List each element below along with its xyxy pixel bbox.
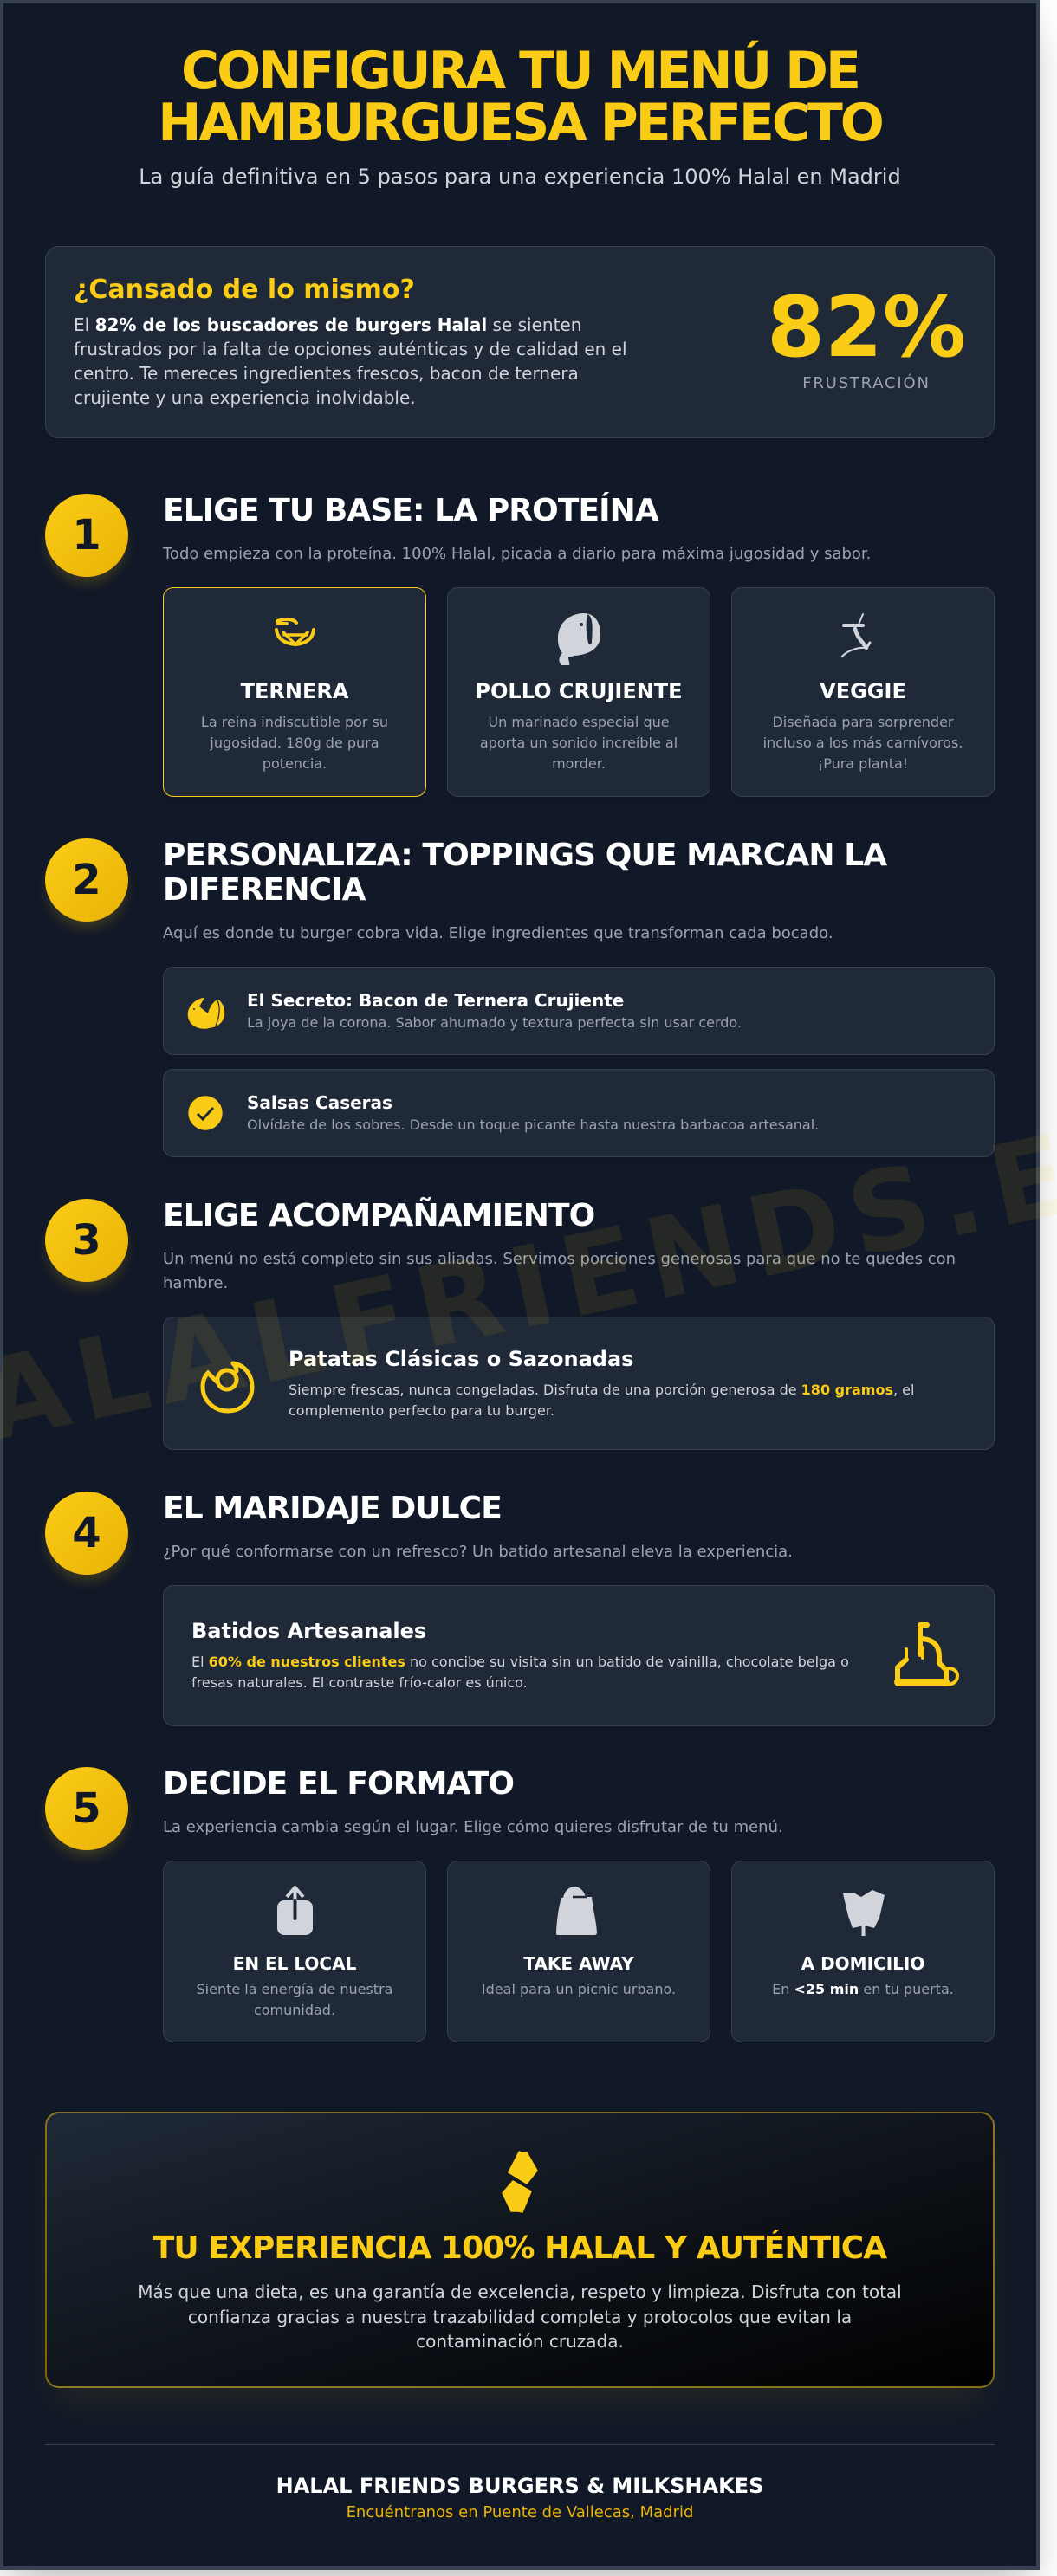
card title: POLLO CRUJIENTE: [475, 679, 683, 703]
format text: Siente la energía de nuestra: [197, 1981, 392, 1997]
stat label: FRUSTRACIÓN: [802, 374, 931, 392]
icon: fries: [201, 1362, 255, 1414]
icon: delivery: [843, 1890, 885, 1936]
step 5 number: [45, 1767, 128, 1850]
step 2 heading: PERSONALIZA: TOPPINGS QUE MARCAN LA: [163, 838, 886, 873]
card title: TERNERA: [241, 679, 348, 703]
panel text: Siempre frescas, nunca congeladas. Disfruta de una porción generosa de 180 gramos, el: [289, 1382, 914, 1398]
step 4 number: 4: [72, 1509, 101, 1557]
format: take away: [447, 1861, 710, 2042]
step 3 heading: ELIGE ACOMPAÑAMIENTO: [163, 1198, 594, 1233]
icon: halal mark: [502, 2151, 538, 2213]
step 2 heading: [163, 838, 887, 908]
step 3 description: hambre.: [163, 1274, 228, 1292]
step 3 number: [45, 1199, 128, 1282]
topping text: La joya de la corona. Sabor ahumado y textura perfecta sin usar cerdo.: [247, 1014, 742, 1031]
format title: A DOMICILIO: [801, 1953, 924, 1974]
format text: En <25 min en tu puerta.: [772, 1981, 954, 1997]
topping: salsas: [163, 1069, 995, 1157]
panel: frustration intro: [45, 246, 995, 438]
promise text: confianza gracias a nuestra trazabilidad completa y protocolos que evitan la: [188, 2306, 852, 2327]
panel text: fresas naturales. El contraste frío-calor es único.: [191, 1674, 528, 1691]
icon: table arrow: [277, 1886, 313, 1935]
promise heading: TU EXPERIENCIA 100% HALAL Y AUTÉNTICA: [153, 2230, 886, 2266]
intro text: [74, 314, 627, 408]
icon: bag: [556, 1887, 597, 1935]
card text: [763, 714, 963, 772]
title: CONFIGURA TU MENÚ DE: [181, 41, 859, 101]
card text: La reina indiscutible por su: [201, 714, 388, 730]
card text: Diseñada para sorprender: [772, 714, 953, 730]
topping text: Olvídate de los sobres. Desde un toque picante hasta nuestra barbacoa artesanal.: [247, 1116, 819, 1133]
topping title: Salsas Caseras: [247, 1092, 392, 1113]
promise text: Más que una dieta, es una garantía de excelencia, respeto y limpieza. Disfruta con total: [138, 2282, 902, 2302]
footer brand: HALAL FRIENDS BURGERS & MILKSHAKES: [276, 2474, 763, 2498]
format title: TAKE AWAY: [523, 1953, 634, 1974]
option: pollo: [447, 587, 710, 797]
format title: EN EL LOCAL: [233, 1953, 356, 1974]
step 3 number: 3: [72, 1216, 101, 1265]
intro text: frustrados por la falta de opciones auténticas y de calidad en el: [74, 339, 627, 359]
panel text: [289, 1382, 914, 1419]
intro text: crujiente y una experiencia inolvidable.: [74, 387, 416, 408]
promise text: contaminación cruzada.: [416, 2331, 624, 2352]
panel text: El 60% de nuestros clientes no concibe su visita sin un batido de vainilla, chocolate belga o: [191, 1654, 849, 1670]
panel title: Batidos Artesanales: [191, 1619, 426, 1643]
intro text: El 82% de los buscadores de burgers Halal se sienten: [74, 314, 581, 335]
title: [158, 40, 882, 153]
step 1 description: Todo empieza con la proteína. 100% Halal, picada a diario para máxima jugosidad y sabor.: [163, 545, 871, 563]
promise text: [138, 2282, 902, 2352]
panel title: Patatas Clásicas o Sazonadas: [289, 1347, 633, 1371]
card text: incluso a los más carnívoros.: [763, 735, 963, 751]
icon: milkshake: [894, 1622, 959, 1686]
step 2 description: Aquí es donde tu burger cobra vida. Elige ingredientes que transforman cada bocado.: [163, 924, 833, 942]
step 5 number: 5: [72, 1784, 101, 1833]
step 2 number: 2: [72, 856, 101, 904]
option: ternera: [163, 587, 426, 797]
step 3 description: Un menú no está completo sin sus aliadas. Servimos porciones generosas para que no te quedes con: [163, 1250, 956, 1268]
icon: leaf sprig: [840, 613, 872, 658]
panel: batidos: [163, 1585, 995, 1726]
intro heading: ¿Cansado de lo mismo?: [74, 275, 415, 305]
step 2 number: [45, 838, 128, 922]
card text: aporta un sonido increíble al: [480, 735, 678, 751]
icon: beef: [275, 618, 315, 646]
format text: Ideal para un picnic urbano.: [482, 1981, 676, 1997]
step 5 description: La experiencia cambia según el lugar. Elige cómo quieres disfrutar de tu menú.: [163, 1818, 783, 1836]
card text: jugosidad. 180g de pura: [210, 735, 379, 751]
step 1 number: [45, 494, 128, 577]
stat: 82%: 82%: [767, 279, 966, 376]
option: veggie: [731, 587, 995, 797]
format text: [197, 1981, 392, 2018]
card text: morder.: [552, 755, 606, 772]
step 1 number: 1: [72, 511, 101, 560]
topping: bacon: [163, 967, 995, 1055]
step 1 heading: ELIGE TU BASE: LA PROTEÍNA: [163, 493, 658, 528]
card text: [480, 714, 678, 772]
panel: patatas: [163, 1317, 995, 1450]
header: [139, 40, 901, 189]
subtitle: La guía definitiva en 5 pasos para una experiencia 100% Halal en Madrid: [139, 165, 901, 189]
intro text: centro. Te mereces ingredientes frescos, bacon de ternera: [74, 363, 579, 384]
format text: comunidad.: [254, 2002, 335, 2018]
step 2 heading: DIFERENCIA: [163, 872, 366, 908]
step 3 description: [163, 1250, 956, 1292]
icon: chicken: [558, 613, 601, 665]
panel text: complemento perfecto para tu burger.: [289, 1402, 554, 1419]
card text: ¡Pura planta!: [818, 755, 908, 772]
card text: [201, 714, 388, 772]
icon: bacon: [187, 998, 225, 1029]
card text: potencia.: [263, 755, 327, 772]
format: a domicilio: [731, 1861, 995, 2042]
format: en el local: [163, 1861, 426, 2042]
icon: check circle: [188, 1096, 223, 1130]
title: HAMBURGUESA PERFECTO: [158, 93, 882, 153]
step 5 heading: DECIDE EL FORMATO: [163, 1766, 514, 1802]
panel: halal promise: [45, 2112, 995, 2388]
topping title: El Secreto: Bacon de Ternera Crujiente: [247, 990, 624, 1011]
card title: VEGGIE: [820, 679, 906, 703]
footer: [45, 2444, 995, 2527]
step 4 heading: EL MARIDAJE DULCE: [163, 1491, 502, 1526]
step 4 description: ¿Por qué conformarse con un refresco? Un batido artesanal eleva la experiencia.: [163, 1543, 793, 1561]
panel text: [191, 1654, 849, 1691]
footer location: Encuéntranos en Puente de Vallecas, Madrid: [347, 2503, 693, 2521]
card text: Un marinado especial que: [488, 714, 670, 730]
step 4 number: [45, 1492, 128, 1575]
